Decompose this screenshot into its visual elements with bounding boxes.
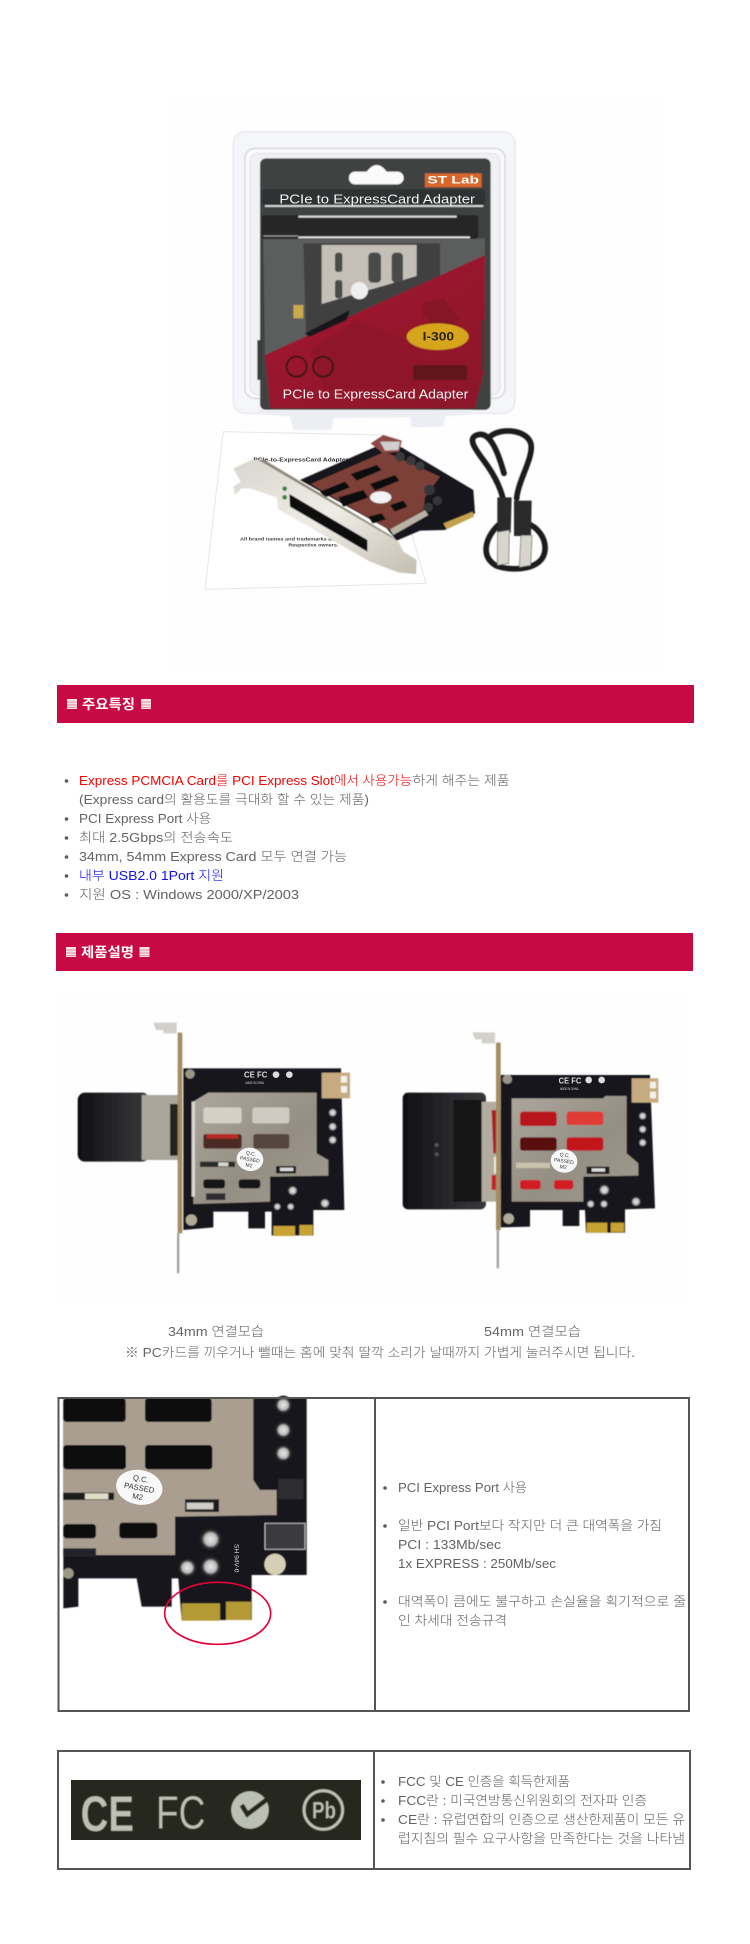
photo: certification marks: FC [156,1786,205,1838]
port description list: 대역폭이 큼에도 불구하고 손실율을 획기적으로 줄 [398,1594,686,1609]
feature bullet list [65,773,510,902]
package text: I-300 [423,330,454,344]
sticker: QC passed: PASSED [240,1155,261,1165]
feature bullet list: 내부 USB2.0 1Port 지원 [79,868,224,883]
circuit board [183,1068,344,1235]
icon: header marker right [140,947,150,957]
caption: 54mm: 54mm 연결모습 [484,1324,581,1339]
feature bullet list: 지원 OS : Windows 2000/XP/2003 [79,887,299,902]
board markings: MADE IN CHINA [246,1080,264,1085]
port description list: 일반 PCI Port보다 작지만 더 큰 대역폭을 가짐 [398,1518,662,1533]
red highlight ellipse [165,1582,271,1644]
section header: key features [57,685,694,723]
certification description list: CE란 : 유럽연합의 인증으로 생산한제품이 모든 유 [398,1812,685,1827]
feature bullet list: 34mm, 54mm Express Card 모두 연결 가능 [79,849,347,864]
blister package [233,132,515,413]
adapter card [233,435,475,574]
photo: card with 54mm ExpressCard inserted [377,993,688,1303]
handle of 54mm card [403,1093,486,1209]
blister feet [257,410,473,430]
sticker: QC passed: Q.C. [245,1150,256,1158]
board markings [559,1076,605,1091]
sticker: QC passed: Q.C. [132,1473,149,1485]
feature bullet list: 하게 해주는 제품 [412,773,510,788]
sticker: QC passed [235,1146,265,1173]
board markings [244,1069,293,1085]
certification description list: FCC란 : 미국연방통신위원회의 전자파 인증 [398,1793,647,1808]
section header: product description: 제품설명 [81,945,134,960]
metal cage [512,1096,638,1202]
section header: key features: 주요특징 [82,697,135,712]
table borders [58,1398,689,1711]
gold fingers [587,1223,607,1233]
package text: PCIe to ExpressCard Adapter [279,192,476,207]
photo: card with 34mm ExpressCard inserted [61,993,372,1303]
sticker: QC passed [113,1466,165,1508]
sticker: QC passed [549,1148,579,1174]
icon: header marker right [141,699,151,709]
sticker: QC passed: M2 [132,1491,144,1502]
feature bullet list: PCI Express Port 사용 [79,811,211,826]
photo: certification marks [71,1780,361,1842]
metal cage [193,1093,328,1204]
note text: ※ PC카드를 끼우거나 뺄때는 홈에 맞춰 딸깍 소리가 날때까지 가볍게 눌러주시면 됩니다. [125,1345,635,1360]
certification description list [381,1774,685,1846]
board markings: CE FC [559,1076,582,1086]
bracket [178,1033,182,1233]
sticker: QC passed: PASSED [123,1481,156,1495]
USB cable [472,431,545,569]
board markings: MADE IN CHINA [560,1086,579,1091]
certification description list: 럽지침의 필수 요구사항을 만족한다는 것을 나타냄 [398,1831,685,1846]
feature bullet list: 최대 2.5Gbps의 전송속도 [79,830,233,845]
sticker: QC passed: M2 [559,1164,567,1171]
sticker: QC passed: M2 [245,1162,253,1169]
photo: retail package and contents [170,100,660,670]
photo: certification marks: Pb [312,1797,336,1824]
bracket [496,1043,501,1230]
sticker: QC passed: PASSED [554,1157,575,1166]
manual sheet: PCIe-to-ExpressCard Adapter [253,458,349,464]
photo: certification marks: CE [81,1786,134,1842]
icon: header marker left [66,947,76,957]
gold fingers [273,1226,295,1236]
feature bullet list: (Express card의 활용도를 극대화 할 수 있는 제품) [79,792,369,807]
manual sheet: Respective owners. [288,543,339,549]
caption: 34mm: 34mm 연결모습 [168,1324,264,1339]
section header: product description [56,933,693,971]
board markings: CE FC [244,1069,268,1079]
icon: header marker left [67,699,77,709]
circuit board [501,1075,655,1233]
package text: ST Lab [427,175,479,187]
feature bullet list: Express PCMCIA Card를 PCI Express Slot에서 사용가능 [79,773,412,788]
port description list: 인 차세대 전송규격 [398,1613,507,1628]
package text [279,175,479,402]
certification description list: FCC 및 CE 인증을 획득한제품 [398,1774,570,1789]
port description list [383,1480,686,1628]
manual sheet [205,432,426,589]
photo: PCI Express connector close-up [63,1396,307,1644]
handle of 34mm card [78,1093,149,1162]
port description list: PCI Express Port 사용 [398,1480,527,1495]
table: PCI Express port [58,1396,689,1711]
package text: PCIe to ExpressCard Adapter [283,387,469,402]
port description list: 1x EXPRESS : 250Mb/sec [398,1556,557,1571]
port description list: PCI : 133Mb/sec [398,1537,502,1552]
package contents: manual, adapter card, USB cable [205,410,545,589]
table: certifications [58,1751,690,1869]
photo background [170,100,660,670]
table borders [58,1751,690,1869]
board marking: SH 94V-0 [232,1544,239,1573]
manual sheet: All brand names and trademarks are [240,537,337,543]
sticker: QC passed: Q.C. [559,1152,570,1159]
